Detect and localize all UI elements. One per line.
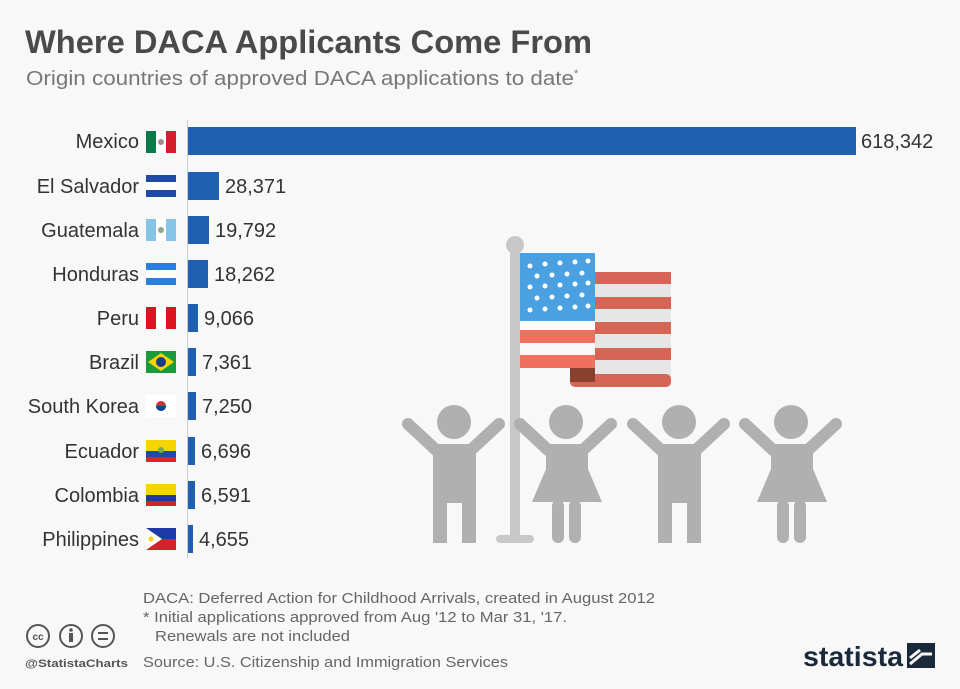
row: Philippines: 4,655 [199,529,249,551]
row: Brazil [89,348,252,376]
row: El Salvador [37,172,286,200]
axis line [186,120,188,558]
row: Honduras [52,260,275,288]
row: Guatemala: 19,792 [215,220,276,242]
child 3 [633,405,724,543]
handle: @StatistaCharts [25,658,128,670]
US flag [520,253,671,387]
subtitle: Origin countries of approved DACA applications to date [26,68,574,90]
footnotes [143,590,655,671]
subtitle: * [574,68,579,80]
row: Colombia [55,481,251,509]
footnotes: Renewals are not included [155,628,350,645]
row: Philippines: Philippines [42,529,139,551]
bar chart [28,127,933,553]
child 2 [520,405,611,543]
row: El Salvador: El Salvador [37,176,139,198]
row: Guatemala [41,216,276,244]
row: Ecuador: 6,696 [201,441,251,463]
row: Mexico: 618,342 [861,131,933,153]
row: Ecuador: Ecuador [64,441,139,463]
row: Colombia: 6,591 [201,485,251,507]
row: Brazil: 7,361 [202,352,252,374]
row: South Korea: South Korea [28,396,140,418]
footnotes: * Initial applications approved from Aug '12 to Mar 31, '17. [143,609,567,626]
row: Honduras: 18,262 [214,264,275,286]
title: Where DACA Applicants Come From [25,24,592,60]
row: Peru [97,304,254,332]
row: Honduras: Honduras [52,264,139,286]
cc license icons: cc [32,632,44,643]
row: Philippines [42,525,249,553]
cc license icons [27,625,114,647]
illustration: flag and children [408,236,836,543]
row: South Korea [28,392,252,420]
row: Colombia: Colombia [55,485,140,507]
children figures [408,405,836,543]
child 1 [408,405,499,543]
row: South Korea: 7,250 [202,396,252,418]
row: Mexico [76,127,933,155]
row: Guatemala: Guatemala [41,220,140,242]
footnotes: DACA: Deferred Action for Childhood Arrivals, created in August 2012 [143,590,655,607]
row: Peru: Peru [97,308,139,330]
child 4 [745,405,836,543]
row: Brazil: Brazil [89,352,139,374]
row: Mexico: Mexico [76,131,139,153]
row: El Salvador: 28,371 [225,176,286,198]
statista logo: statista [803,641,903,672]
row: Ecuador [64,437,251,465]
footnotes: Source: U.S. Citizenship and Immigration Services [143,654,508,671]
flagpole [496,236,534,543]
row: Peru: 9,066 [204,308,254,330]
